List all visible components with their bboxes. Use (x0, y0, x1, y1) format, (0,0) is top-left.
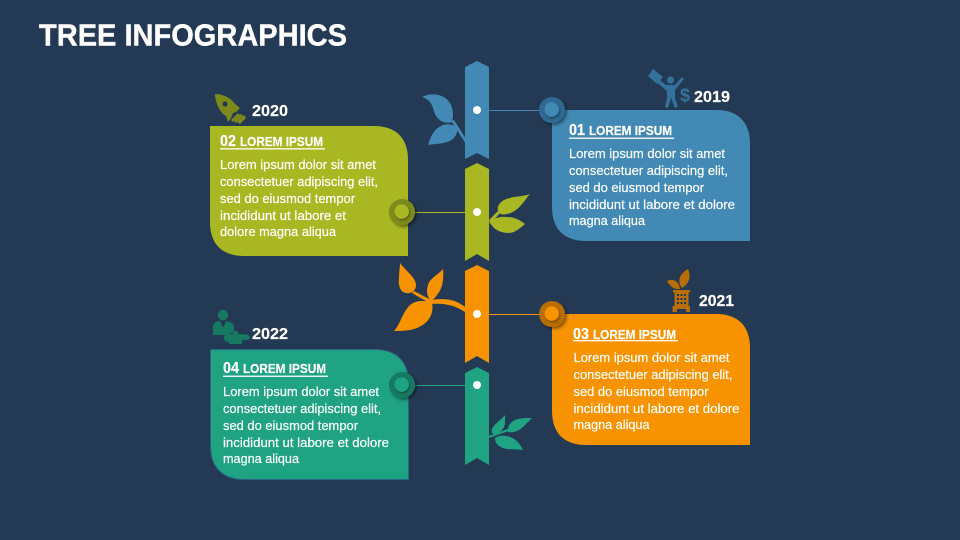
body text: 04: magna aliqua (223, 451, 300, 466)
body text: 01 (569, 146, 735, 228)
body text: 01: incididunt ut labore et dolore (569, 197, 735, 212)
title: TREE INFOGRAPHICS (39, 18, 347, 52)
heading: 04 (223, 360, 328, 377)
icon: man with hammer and dollar: $ (680, 86, 690, 106)
green ribbon segment (465, 163, 489, 261)
year: 2021: 2021 (699, 293, 734, 310)
heading: 04: LOREM IPSUM (243, 362, 326, 376)
heading: 02 (220, 133, 325, 150)
body text: 04: sed do eiusmod tempor (223, 418, 359, 433)
panel: 04 2022 (210, 350, 408, 480)
body text: 02: incididunt ut labore et (220, 208, 346, 223)
green leaves (489, 194, 530, 233)
body text: 04 (223, 384, 389, 466)
heading: 01: 01 (569, 122, 585, 139)
body text: 02 (220, 157, 378, 239)
connector: 2021 (489, 314, 541, 316)
heading: 01: LOREM IPSUM (589, 124, 672, 138)
body text: 01: Lorem ipsum dolor sit amet (569, 146, 725, 161)
body text: 03: Lorem ipsum dolor sit amet (574, 350, 730, 365)
teal ribbon segment (465, 367, 489, 465)
body text: 04: Lorem ipsum dolor sit amet (223, 384, 379, 399)
connector: 2019 (489, 110, 541, 112)
heading: 02: LOREM IPSUM (240, 135, 323, 149)
heading: 01 (569, 122, 674, 139)
body text: 02: sed do eiusmod tempor (220, 191, 356, 206)
body text: 01: magna aliqua (569, 213, 646, 228)
node: 04 (389, 372, 415, 398)
heading: 03 (573, 326, 678, 343)
node: 01 (539, 97, 565, 123)
node: 03 (539, 301, 565, 327)
panel: 01 2019 (552, 110, 750, 241)
blue leaves (422, 94, 466, 145)
teal leaves (489, 415, 532, 450)
panel: 03 2021 (552, 314, 750, 445)
body text: 04: incididunt ut labore et dolore (223, 435, 389, 450)
heading: 03: 03 (573, 326, 589, 343)
body text: 02: consectetuer adipiscing elit, (220, 174, 378, 189)
node: 02 (389, 199, 415, 225)
panel: 02 2020 (210, 126, 408, 256)
heading: 02: 02 (220, 133, 236, 150)
connector: 2022 (414, 384, 465, 386)
year: 2019: 2019 (694, 89, 730, 106)
body text: 03 (574, 350, 740, 432)
year: 2020: 2020 (252, 103, 288, 120)
icon: rocket (215, 94, 246, 124)
body text: 03: sed do eiusmod tempor (574, 384, 709, 399)
icon: potted plant building (667, 269, 690, 312)
body text: 04: consectetuer adipiscing elit, (223, 401, 381, 416)
icon: man with hammer and dollar (648, 69, 690, 108)
body text: 01: consectetuer adipiscing elit, (569, 163, 728, 178)
body text: 03: magna aliqua (574, 417, 650, 432)
orange ribbon segment (465, 265, 489, 363)
body text: 02: dolore magna aliqua (220, 224, 337, 239)
tree trunk (465, 61, 489, 465)
connector: 2020 (414, 212, 465, 214)
orange leaves (394, 263, 465, 331)
year: 2022: 2022 (252, 326, 288, 343)
icon: businessman with puzzle piece (213, 310, 250, 344)
heading: 04: 04 (223, 360, 239, 377)
blue ribbon segment (465, 61, 489, 159)
body text: 03: incididunt ut labore et dolore (574, 401, 740, 416)
body text: 03: consectetuer adipiscing elit, (574, 367, 732, 382)
body text: 01: sed do eiusmod tempor (569, 180, 705, 195)
heading: 03: LOREM IPSUM (593, 328, 676, 342)
body text: 02: Lorem ipsum dolor sit amet (220, 157, 376, 172)
